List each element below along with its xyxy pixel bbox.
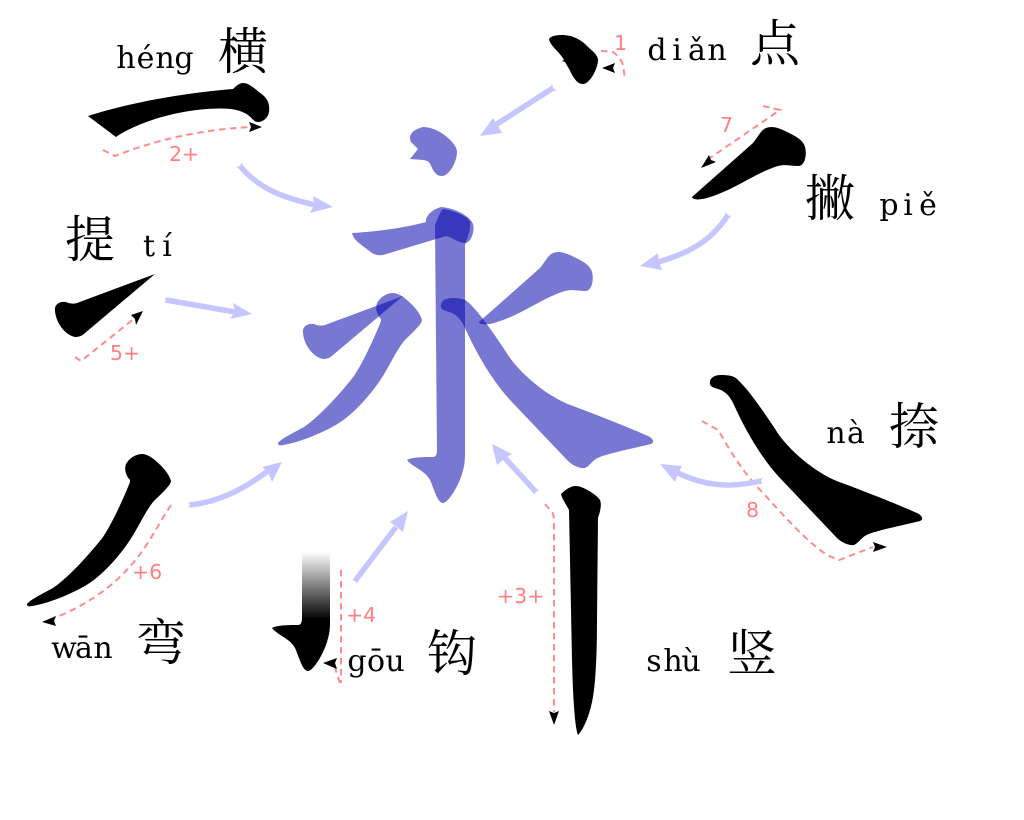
ti hanzi: 提 [65,212,115,268]
dian arrow to center [480,83,557,136]
dian arrowhead [602,63,615,73]
na black stroke [710,375,922,545]
na order path [702,421,873,560]
stroke 6: wan [27,454,282,671]
dian pinyin: diǎn [647,33,727,68]
wan arrowhead [42,616,56,626]
heng pinyin: héng [116,41,194,76]
stroke 3: shu [492,444,777,735]
ti number: 5+ [110,341,140,365]
na arrowhead [873,542,887,552]
stroke 1: dian [480,16,801,136]
na number: 8 [746,498,759,522]
wan order path [57,505,171,617]
heng arrow to center [236,162,333,213]
shu hanzi: 竖 [727,626,777,682]
heng order path [103,127,250,156]
shu black stroke [561,486,601,735]
dian number: 1 [614,31,627,55]
gou hanzi: 钩 [427,626,477,682]
dian black stroke [549,35,598,84]
gou order path [335,570,341,683]
gou fading stem [302,552,330,624]
shu arrowhead [549,711,559,725]
wan number: +6 [132,560,162,584]
shu number: +3+ [497,584,544,608]
wan black stroke [27,454,171,606]
heng black stroke [88,83,269,137]
heng number: 2+ [169,142,199,166]
wan pinyin: wān [51,631,113,666]
ti pinyin: tí [143,229,172,264]
pie black stroke [692,127,806,199]
heng arrowhead [249,122,262,132]
stroke 4: gou [272,511,477,683]
wan hanzi: 弯 [136,615,186,671]
ti black stroke [55,274,155,337]
na arrow to center [660,464,763,485]
stroke 8: na [660,375,939,560]
ti arrowhead [131,311,143,325]
na hanzi: 捺 [889,399,939,455]
dian order path [601,51,625,79]
pie number: 7 [720,113,733,137]
stroke 7: pie [640,106,937,270]
pie arrow to center [640,212,732,270]
ti arrow to center [164,297,252,319]
wan arrow to center [188,462,282,508]
pie pinyin: piě [879,188,937,223]
dian hanzi: 点 [750,16,801,72]
central character built from overlapping translucent strokes [278,127,653,503]
shu pinyin: shù [646,644,701,679]
stroke 5: ti [55,212,252,365]
pie hanzi: 撇 [805,171,855,227]
pie arrowhead [701,155,716,168]
stroke 2: heng [88,24,333,213]
ti order path [75,318,135,361]
na pinyin: nà [826,416,865,451]
gou arrowhead [323,658,337,669]
shu arrow to center [492,444,539,495]
heng hanzi: 横 [218,24,268,80]
gou arrow to center [352,511,408,584]
gou black hook [272,618,330,671]
gou number: +4 [346,603,376,627]
pie order path [710,106,780,158]
gou pinyin: gōu [347,644,405,679]
shu order path [545,504,554,712]
